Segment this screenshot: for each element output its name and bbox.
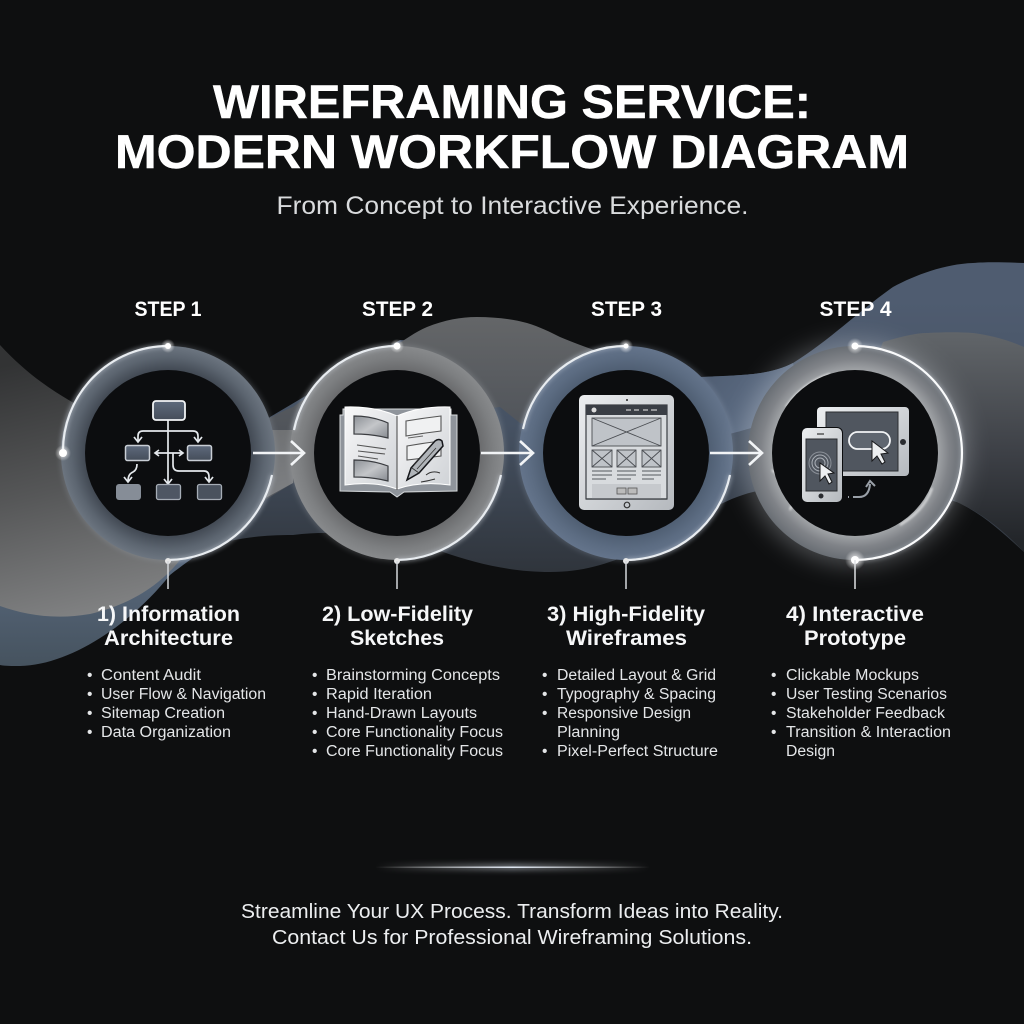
footer call to action: Contact Us for Professional Wireframing Solutions. — [272, 927, 752, 949]
step 4 text: Prototype — [804, 626, 906, 650]
step labels: STEP 4 — [820, 298, 892, 321]
step 2 text: • — [312, 743, 317, 760]
step 3 text: Planning — [557, 724, 620, 741]
step 1 text — [87, 602, 266, 741]
icon: sitemap — [116, 401, 222, 500]
step 1 node — [55, 339, 276, 589]
step 3 text: Typography & Spacing — [557, 686, 716, 703]
step 3 node — [518, 339, 734, 589]
step 2 text: Brainstorming Concepts — [326, 667, 500, 684]
step 3 text: Wireframes — [566, 626, 687, 650]
step 1 text: Sitemap Creation — [101, 705, 225, 722]
title — [115, 75, 909, 178]
step labels: STEP 3 — [591, 298, 662, 321]
step 2 text: • — [312, 667, 317, 684]
step 1 text: 1) Information — [97, 602, 240, 626]
step 3 text: • — [542, 705, 547, 722]
step 2 text: Hand-Drawn Layouts — [326, 705, 477, 722]
step 4 text: User Testing Scenarios — [786, 686, 947, 703]
step 1 text: • — [87, 724, 92, 741]
step 2 text — [312, 602, 503, 760]
step 2 node — [289, 339, 505, 589]
step 3 text: • — [542, 667, 547, 684]
step 3 text: • — [542, 743, 547, 760]
step 2 text: Rapid Iteration — [326, 686, 432, 703]
step labels: STEP 1 — [134, 298, 202, 321]
step 3 text — [542, 602, 718, 760]
step 4 text: • — [771, 667, 776, 684]
step 4 text: Design — [786, 743, 835, 760]
arrow 2 to 3 — [481, 441, 533, 465]
step 4 text: Transition & Interaction — [786, 724, 951, 741]
step 2 text: Sketches — [350, 626, 444, 650]
step 3 text: Detailed Layout & Grid — [557, 667, 716, 684]
title: WIREFRAMING SERVICE: — [213, 75, 811, 128]
step 1 text: Data Organization — [101, 724, 231, 741]
step labels: STEP 2 — [362, 298, 433, 321]
step 4 text: • — [771, 705, 776, 722]
icon: open book with pencil — [340, 407, 457, 497]
step 2 text: • — [312, 724, 317, 741]
step 4 text — [771, 602, 951, 760]
background waves — [0, 262, 1024, 666]
footer call to action: Streamline Your UX Process. Transform Ideas into Reality. — [241, 901, 783, 923]
arrow 3 to 4 — [710, 441, 762, 465]
step 1 text: • — [87, 705, 92, 722]
step 4 text: Stakeholder Feedback — [786, 705, 945, 722]
step labels — [134, 298, 892, 321]
step 1 text: • — [87, 667, 92, 684]
step 1 text: User Flow & Navigation — [101, 686, 266, 703]
footer glow divider — [375, 864, 650, 870]
step 3 text: 3) High-Fidelity — [547, 602, 705, 626]
step 4 text: • — [771, 686, 776, 703]
step 2 text: 2) Low-Fidelity — [322, 602, 473, 626]
step 4 text: • — [771, 724, 776, 741]
title: MODERN WORKFLOW DIAGRAM — [115, 125, 909, 178]
step 3 text: Responsive Design — [557, 705, 691, 722]
step 1 text: Content Audit — [101, 667, 202, 684]
subtitle: From Concept to Interactive Experience. — [276, 192, 748, 220]
step 2 text: • — [312, 705, 317, 722]
step 2 text: • — [312, 686, 317, 703]
step 3 text: • — [542, 686, 547, 703]
step 1 text: • — [87, 686, 92, 703]
step 2 text: Core Functionality Focus — [326, 724, 503, 741]
icon: wireframe tablet — [579, 395, 674, 510]
step 4 node — [743, 338, 967, 589]
step 2 text: Core Functionality Focus — [326, 743, 503, 760]
icon: phone and tablet prototype — [801, 407, 909, 503]
step 1 text: Architecture — [104, 626, 233, 650]
step 4 text: 4) Interactive — [786, 602, 924, 626]
footer call to action — [241, 901, 783, 949]
arrow 1 to 2 — [253, 441, 304, 465]
step 4 text: Clickable Mockups — [786, 667, 919, 684]
step 3 text: Pixel-Perfect Structure — [557, 743, 718, 760]
